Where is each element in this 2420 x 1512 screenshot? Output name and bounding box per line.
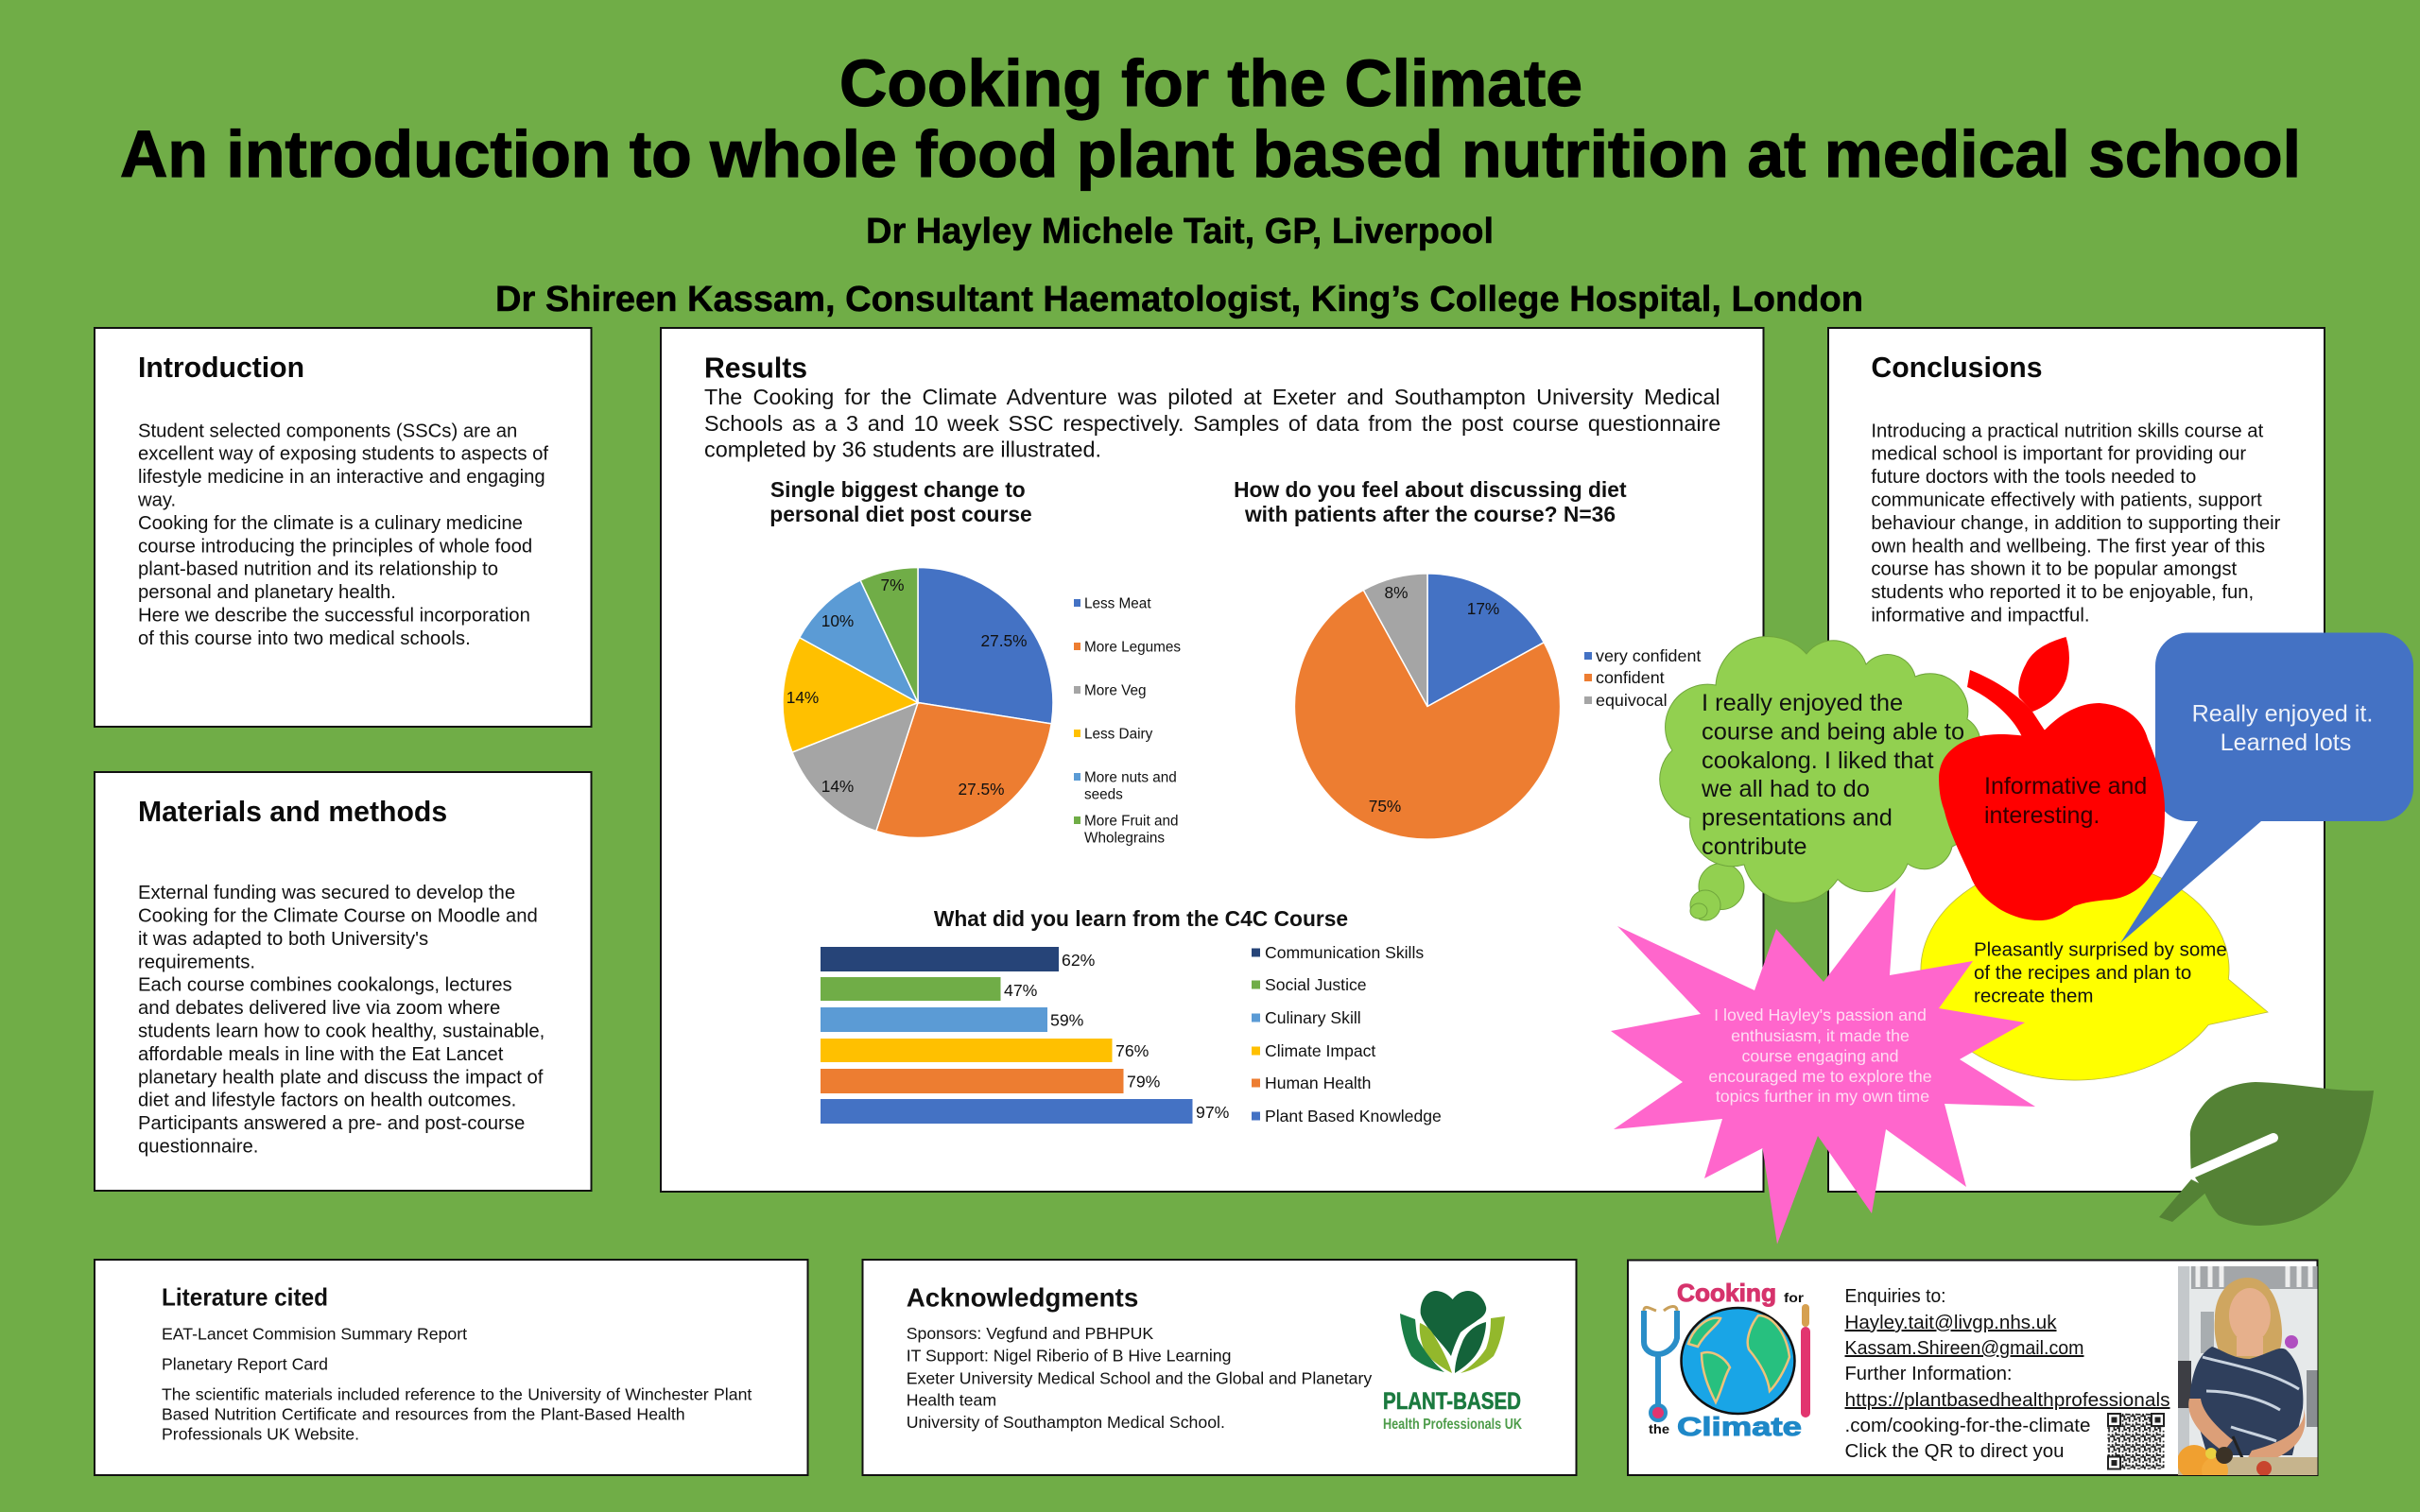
chart title: diet change: personal diet post course xyxy=(769,502,1032,526)
icon: cooking for the climate logo xyxy=(1644,1279,1810,1441)
pie labels: diet change xyxy=(786,576,1028,799)
text: references: EAT-Lancet Commision Summary Report xyxy=(162,1324,467,1343)
text: enquiries and links: https://plantbasedhealthprofessionals xyxy=(1845,1390,2170,1411)
pie labels: discussing diet xyxy=(1369,583,1499,816)
legend: discussing diet: equivocal xyxy=(1596,691,1668,710)
callout shape: blue speech bubble xyxy=(2120,633,2413,943)
authors: Dr Shireen Kassam, Consultant Haematologist, King’s College Hospital, London xyxy=(495,280,1863,319)
title xyxy=(120,46,2301,191)
text: enquiries and links: Enquiries to: xyxy=(1845,1286,1945,1307)
legend: diet change: More nuts and xyxy=(1084,769,1177,786)
legend: diet change: seeds xyxy=(1084,786,1123,803)
text: introduction body: way. xyxy=(137,490,176,511)
panel: conclusions xyxy=(1828,328,2325,1192)
text: introduction body: Cooking for the climate is a culinary medicine xyxy=(138,513,523,534)
legend: discussing diet xyxy=(1584,646,1701,710)
text: enquiries and links: Hayley.tait@livgp.nhs.uk xyxy=(1845,1313,2058,1333)
text: methods body: affordable meals in line with the Eat Lancet xyxy=(138,1044,504,1065)
legend: diet change xyxy=(1074,595,1181,847)
legend: discussing diet: very confident xyxy=(1596,646,1701,665)
text: cloud quote: we all had to do xyxy=(1701,776,1870,802)
text: introduction body: plant-based nutrition and its relationship to xyxy=(138,559,498,580)
panel: materials and methods xyxy=(95,772,592,1191)
legend: what did you learn: Communication Skills xyxy=(1265,943,1424,962)
text: conclusions body: course has shown it to be popular amongst xyxy=(1871,559,2237,580)
pie chart: discussing diet xyxy=(1294,574,1561,839)
text: conclusions body: students who reported it to be enjoyable, fun, xyxy=(1871,582,2254,603)
legend: what did you learn: Human Health xyxy=(1265,1074,1371,1092)
text: methods body: requirements. xyxy=(138,952,255,972)
pie labels: diet change: 10% xyxy=(821,611,854,630)
text: methods body: External funding was secured to develop the xyxy=(138,883,515,903)
pie labels: diet change: 14% xyxy=(821,777,854,796)
icon: cooking for the climate logo: Cooking xyxy=(1677,1279,1776,1307)
text: yellow speech bubble: recreate them xyxy=(1974,986,2093,1007)
legend: what did you learn: Social Justice xyxy=(1265,975,1367,994)
legend: what did you learn: Culinary Skill xyxy=(1265,1008,1361,1027)
text: conclusions body: medical school is important for providing our xyxy=(1871,444,2246,465)
icon: plant-based logo: Health Professionals UK xyxy=(1383,1417,1522,1433)
text: blue speech bubble: Learned lots xyxy=(2221,730,2351,756)
text: acknowledgments body: Exeter University Medical School and the Global and Planetary xyxy=(907,1368,1372,1387)
text: introduction body: course introducing the principles of whole food xyxy=(138,536,532,557)
text: starburst quote: enthusiasm, it made the xyxy=(1731,1026,1910,1045)
text: starburst quote: topics further in my own time xyxy=(1716,1087,1929,1106)
text: methods body: planetary health plate and discuss the impact of xyxy=(138,1067,544,1088)
text: enquiries and links: Further Information: xyxy=(1845,1364,2012,1384)
legend: what did you learn xyxy=(1252,943,1442,1125)
bar labels: 97% xyxy=(1196,1103,1230,1122)
text: results intro: The Cooking for the Climate Adventure was piloted at Exeter and Southampton University Medical xyxy=(704,385,1720,409)
text: enquiries and links: .com/cooking-for-the-climate xyxy=(1845,1416,2091,1436)
text: references: Professionals UK Website. xyxy=(162,1425,359,1444)
text: enquiries and links xyxy=(1845,1286,2170,1462)
text: cloud quote: contribute xyxy=(1702,833,1807,860)
bar labels: 76% xyxy=(1115,1041,1150,1060)
callout: red apple xyxy=(1939,637,2165,920)
heading: introduction: Introduction xyxy=(138,352,304,384)
pie labels: diet change: 27.5% xyxy=(958,780,1005,799)
pie labels: discussing diet: 8% xyxy=(1385,583,1408,602)
authors: Dr Hayley Michele Tait, GP, Liverpool xyxy=(866,212,1494,251)
icon: cooking for the climate logo: Climate xyxy=(1677,1412,1802,1441)
pie labels: diet change: 14% xyxy=(786,688,819,707)
text: methods body: diet and lifestyle factors on health outcomes. xyxy=(138,1091,516,1111)
text: conclusions body: informative and impactful. xyxy=(1871,606,2089,627)
panel: introduction xyxy=(95,328,592,727)
text: results intro: completed by 36 students are illustrated. xyxy=(704,437,1101,461)
callout: green thought cloud xyxy=(1660,637,1992,920)
text: introduction body: personal and planetary health. xyxy=(138,582,396,603)
bar labels: 62% xyxy=(1062,951,1096,970)
text: references: The scientific materials included reference to the University of Winchester Plant xyxy=(162,1385,752,1404)
text: conclusions body: behaviour change, in addition to supporting their xyxy=(1871,513,2281,534)
legend: discussing diet: confident xyxy=(1596,668,1665,687)
text: cloud quote: cookalong. I liked that xyxy=(1702,747,1934,774)
callout shape: yellow speech bubble xyxy=(1921,859,2268,1080)
text: references: Based Nutrition Certificate and resources from the Plant-Based Health xyxy=(162,1405,685,1424)
icon: cooking for the climate logo: the xyxy=(1649,1421,1669,1436)
title: Cooking for the Climate xyxy=(839,46,1582,120)
panel: enquiries xyxy=(1628,1261,2318,1484)
legend: diet change: Wholegrains xyxy=(1084,830,1165,847)
text: conclusions body: communicate effectively with patients, support xyxy=(1871,490,2262,511)
pie chart: diet change xyxy=(783,567,1053,837)
text: methods body: Cooking for the Climate Course on Moodle and xyxy=(138,906,538,927)
heading: conclusions: Conclusions xyxy=(1871,352,2043,384)
text: enquiries and links: Click the QR to direct you xyxy=(1845,1441,2065,1462)
text: starburst quote: encouraged me to explore the xyxy=(1708,1067,1932,1086)
icon: cooking for the climate logo: for xyxy=(1784,1290,1805,1305)
chart title: discussing diet: with patients after the course? N=36 xyxy=(1244,502,1616,526)
text: introduction body: of this course into two medical schools. xyxy=(138,628,471,649)
chart title: discussing diet: How do you feel about discussing diet xyxy=(1234,477,1627,502)
text: results intro: Schools as a 3 and 10 week SSC respectively. Samples of data from the post course questionnaire xyxy=(704,411,1720,436)
text: cloud quote: I really enjoyed the xyxy=(1702,690,1903,716)
text: cloud quote: course and being able to xyxy=(1702,718,1964,745)
pie labels: diet change: 27.5% xyxy=(980,631,1028,650)
text: acknowledgments body: Sponsors: Vegfund and PBHPUK xyxy=(907,1324,1153,1343)
photo: presenter in kitchen xyxy=(2177,1266,2318,1484)
heading: acknowledgments: Acknowledgments xyxy=(907,1283,1138,1313)
text: acknowledgments body: University of Southampton Medical School. xyxy=(907,1413,1225,1432)
bar labels: 79% xyxy=(1127,1072,1161,1091)
text: conclusions body: own health and wellbeing. The first year of this xyxy=(1871,536,2265,557)
callout: pink starburst xyxy=(1611,887,2035,1244)
panel: literature cited xyxy=(95,1260,807,1475)
text: introduction body: Here we describe the successful incorporation xyxy=(138,606,530,627)
bar labels: 59% xyxy=(1050,1011,1084,1030)
text: yellow speech bubble: Pleasantly surprised by some xyxy=(1974,939,2227,961)
pie labels: discussing diet: 17% xyxy=(1467,599,1499,618)
text: references: Planetary Report Card xyxy=(162,1354,328,1373)
panel: results xyxy=(661,328,1764,1192)
text: apple quote: interesting. xyxy=(1984,802,2100,829)
legend: diet change: More Veg xyxy=(1084,682,1146,699)
legend: diet change: Less Meat xyxy=(1084,595,1151,612)
bar labels: 47% xyxy=(1004,981,1038,1000)
icon: green leaf xyxy=(2159,1082,2374,1226)
text: acknowledgments body: Health team xyxy=(907,1391,996,1410)
bar labels xyxy=(1004,951,1230,1122)
text: conclusions body: Introducing a practical nutrition skills course at xyxy=(1871,421,2264,441)
heading: materials and methods: Materials and methods xyxy=(138,797,447,828)
heading: literature cited: Literature cited xyxy=(162,1283,328,1312)
chart title: what did you learn: What did you learn from the C4C Course xyxy=(934,906,1348,931)
text: conclusions body: future doctors with the tools needed to xyxy=(1871,467,2196,488)
chart title: diet change: Single biggest change to xyxy=(770,477,1026,502)
text: enquiries and links: Kassam.Shireen@gmail.com xyxy=(1845,1338,2083,1359)
text: methods body: Participants answered a pre- and post-course xyxy=(138,1113,525,1134)
title: An introduction to whole food plant based nutrition at medical school xyxy=(120,117,2301,191)
text: yellow speech bubble: of the recipes and plan to xyxy=(1974,962,2191,984)
icon: QR code xyxy=(2108,1414,2165,1469)
text: apple quote: Informative and xyxy=(1984,773,2147,799)
heading: results: Results xyxy=(704,352,807,384)
text: introduction body: excellent way of exposing students to aspects of xyxy=(138,444,548,465)
text: introduction body: Student selected components (SSCs) are an xyxy=(138,421,517,441)
text: methods body: it was adapted to both University's xyxy=(138,929,428,950)
text: blue speech bubble: Really enjoyed it. xyxy=(2192,701,2373,728)
icon: plant-based logo: PLANT-BASED xyxy=(1383,1388,1521,1415)
legend: diet change: More Legumes xyxy=(1084,639,1181,656)
text: methods body: and debates delivered live via zoom where xyxy=(138,998,500,1019)
authors xyxy=(495,212,1863,319)
legend: what did you learn: Climate Impact xyxy=(1265,1041,1375,1060)
text: methods body: students learn how to cook healthy, sustainable, xyxy=(138,1022,544,1042)
text: starburst quote: course engaging and xyxy=(1741,1047,1899,1066)
panel: acknowledgments xyxy=(862,1260,1577,1475)
text: starburst quote: I loved Hayley's passion and xyxy=(1714,1005,1927,1024)
text: methods body: questionnaire. xyxy=(138,1136,258,1157)
text: cloud quote: presentations and xyxy=(1702,805,1893,832)
icon: plant-based logo xyxy=(1383,1291,1522,1433)
pie labels: discussing diet: 75% xyxy=(1369,797,1401,816)
text: introduction body: lifestyle medicine in an interactive and engaging xyxy=(138,467,545,488)
text: methods body: Each course combines cookalongs, lectures xyxy=(138,975,512,996)
legend: what did you learn: Plant Based Knowledge xyxy=(1265,1107,1442,1125)
legend: diet change: More Fruit and xyxy=(1084,813,1178,830)
bar chart: what did you learn xyxy=(821,947,1193,1124)
legend: diet change: Less Dairy xyxy=(1084,726,1153,743)
pie labels: diet change: 7% xyxy=(881,576,904,594)
text: acknowledgments body: IT Support: Nigel Riberio of B Hive Learning xyxy=(907,1347,1231,1366)
